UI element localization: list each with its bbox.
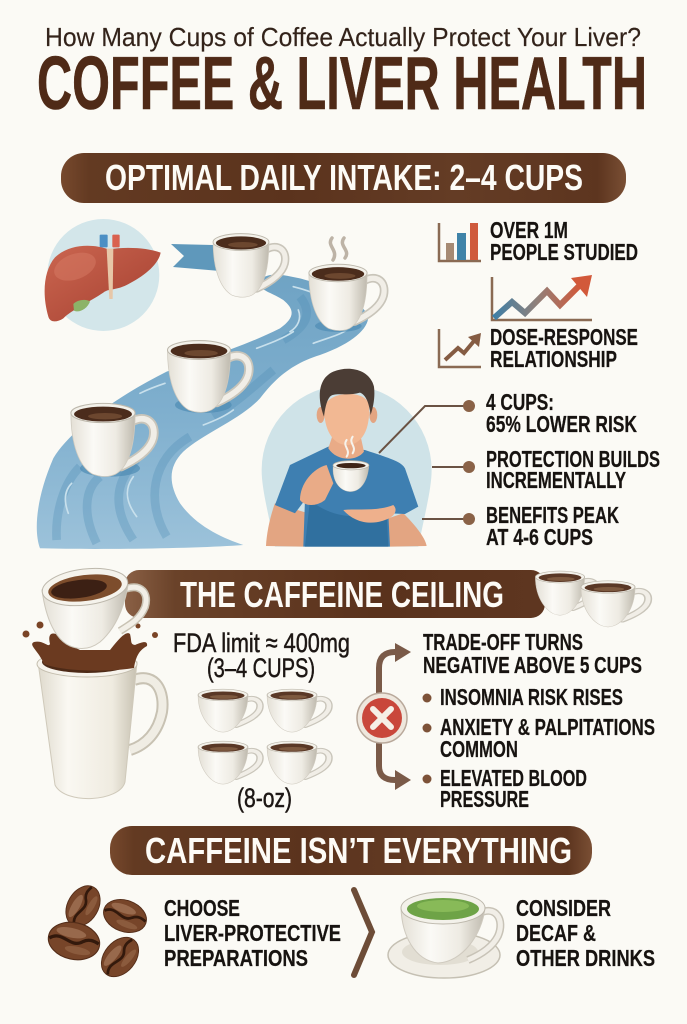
stat: over 1M people studied: OVER 1M	[490, 217, 568, 243]
text: FDA limit: (3–4 CUPS)	[207, 653, 315, 683]
section banner: caffeine ceiling	[125, 570, 545, 618]
stat: over 1M people studied: PEOPLE STUDIED	[490, 239, 638, 265]
callout: 65% lower risk: 4 CUPS:	[486, 389, 554, 415]
chart: rising dose-response line	[492, 275, 592, 320]
section banner: caffeine isn't everything: CAFFEINE ISN’T EVERYTHING	[145, 830, 572, 871]
text: choose preparations: CHOOSE	[164, 895, 240, 921]
trade-off heading: TRADE-OFF TURNS	[423, 629, 583, 655]
stat: dose-response relationship	[490, 324, 638, 372]
bullet: blood pressure: PRESSURE	[440, 786, 529, 812]
arrow: branch up	[379, 643, 411, 697]
callout: 65% lower risk	[486, 389, 637, 437]
bullet: blood pressure: ELEVATED BLOOD	[440, 765, 587, 791]
coffee cup 1 on river	[213, 234, 285, 297]
bullet: insomnia	[422, 684, 623, 710]
section banner: optimal daily intake	[61, 153, 626, 203]
text: consider decaf: OTHER DRINKS	[516, 945, 655, 971]
icon: coffee beans	[45, 880, 151, 984]
text: consider decaf: CONSIDER	[516, 895, 611, 921]
illustration: cup dropping into mug	[40, 564, 146, 649]
callout: 65% lower risk: 65% LOWER RISK	[486, 411, 637, 437]
trade-off heading	[423, 629, 642, 678]
icon: red x badge	[357, 693, 407, 743]
subtitle: How Many Cups of Coffee Actually Protect Your Liver?	[45, 22, 641, 52]
text: FDA limit	[173, 628, 350, 683]
four 8-oz cups	[198, 689, 329, 784]
icon: green tea cup on saucer	[388, 892, 500, 978]
stat: dose-response relationship: DOSE-RESPONSE	[490, 324, 638, 350]
two coffee cups by banner	[535, 571, 648, 627]
callout: benefits peak	[486, 502, 619, 550]
callout: benefits peak: AT 4-6 CUPS	[486, 524, 593, 550]
callout connectors	[379, 400, 475, 525]
callout: protection builds	[486, 446, 660, 493]
bullet: anxiety	[422, 714, 655, 762]
callout: benefits peak: BENEFITS PEAK	[486, 502, 619, 528]
section banner: caffeine isn't everything	[110, 826, 592, 875]
text: choose preparations: PREPARATIONS	[164, 945, 308, 971]
bullet: blood pressure	[422, 765, 587, 812]
text: FDA limit: FDA limit ≈ 400mg	[173, 628, 350, 658]
text: consider decaf: DECAF &	[516, 920, 596, 946]
ribbon tail of the river	[171, 244, 232, 272]
callout: protection builds: INCREMENTALLY	[486, 467, 626, 493]
text: consider decaf	[516, 895, 655, 971]
chevron arrow	[354, 890, 372, 975]
illustration: man drinking coffee	[262, 369, 432, 547]
label: 8-oz: (8-oz)	[237, 783, 292, 813]
coffee cup 2 on river with steam	[309, 238, 384, 330]
icon: liver	[45, 219, 161, 331]
icon: small trend chart	[439, 329, 481, 367]
coffee cup 4 on river	[71, 403, 154, 476]
arrow: branch down	[379, 740, 411, 790]
coffee river	[37, 275, 368, 549]
stat: dose-response relationship: RELATIONSHIP	[490, 346, 617, 372]
bullet: anxiety: COMMON	[440, 736, 518, 762]
icon: bar chart	[439, 223, 481, 261]
text: choose preparations: LIVER-PROTECTIVE	[164, 920, 341, 946]
text: choose preparations	[164, 895, 341, 971]
bullet: insomnia: INSOMNIA RISK RISES	[440, 684, 623, 710]
coffee cup 3 on river	[168, 341, 249, 412]
illustration: large mug with splash	[22, 622, 163, 799]
section banner: caffeine ceiling: THE CAFFEINE CEILING	[180, 574, 504, 615]
stat: over 1M people studied	[490, 217, 638, 265]
